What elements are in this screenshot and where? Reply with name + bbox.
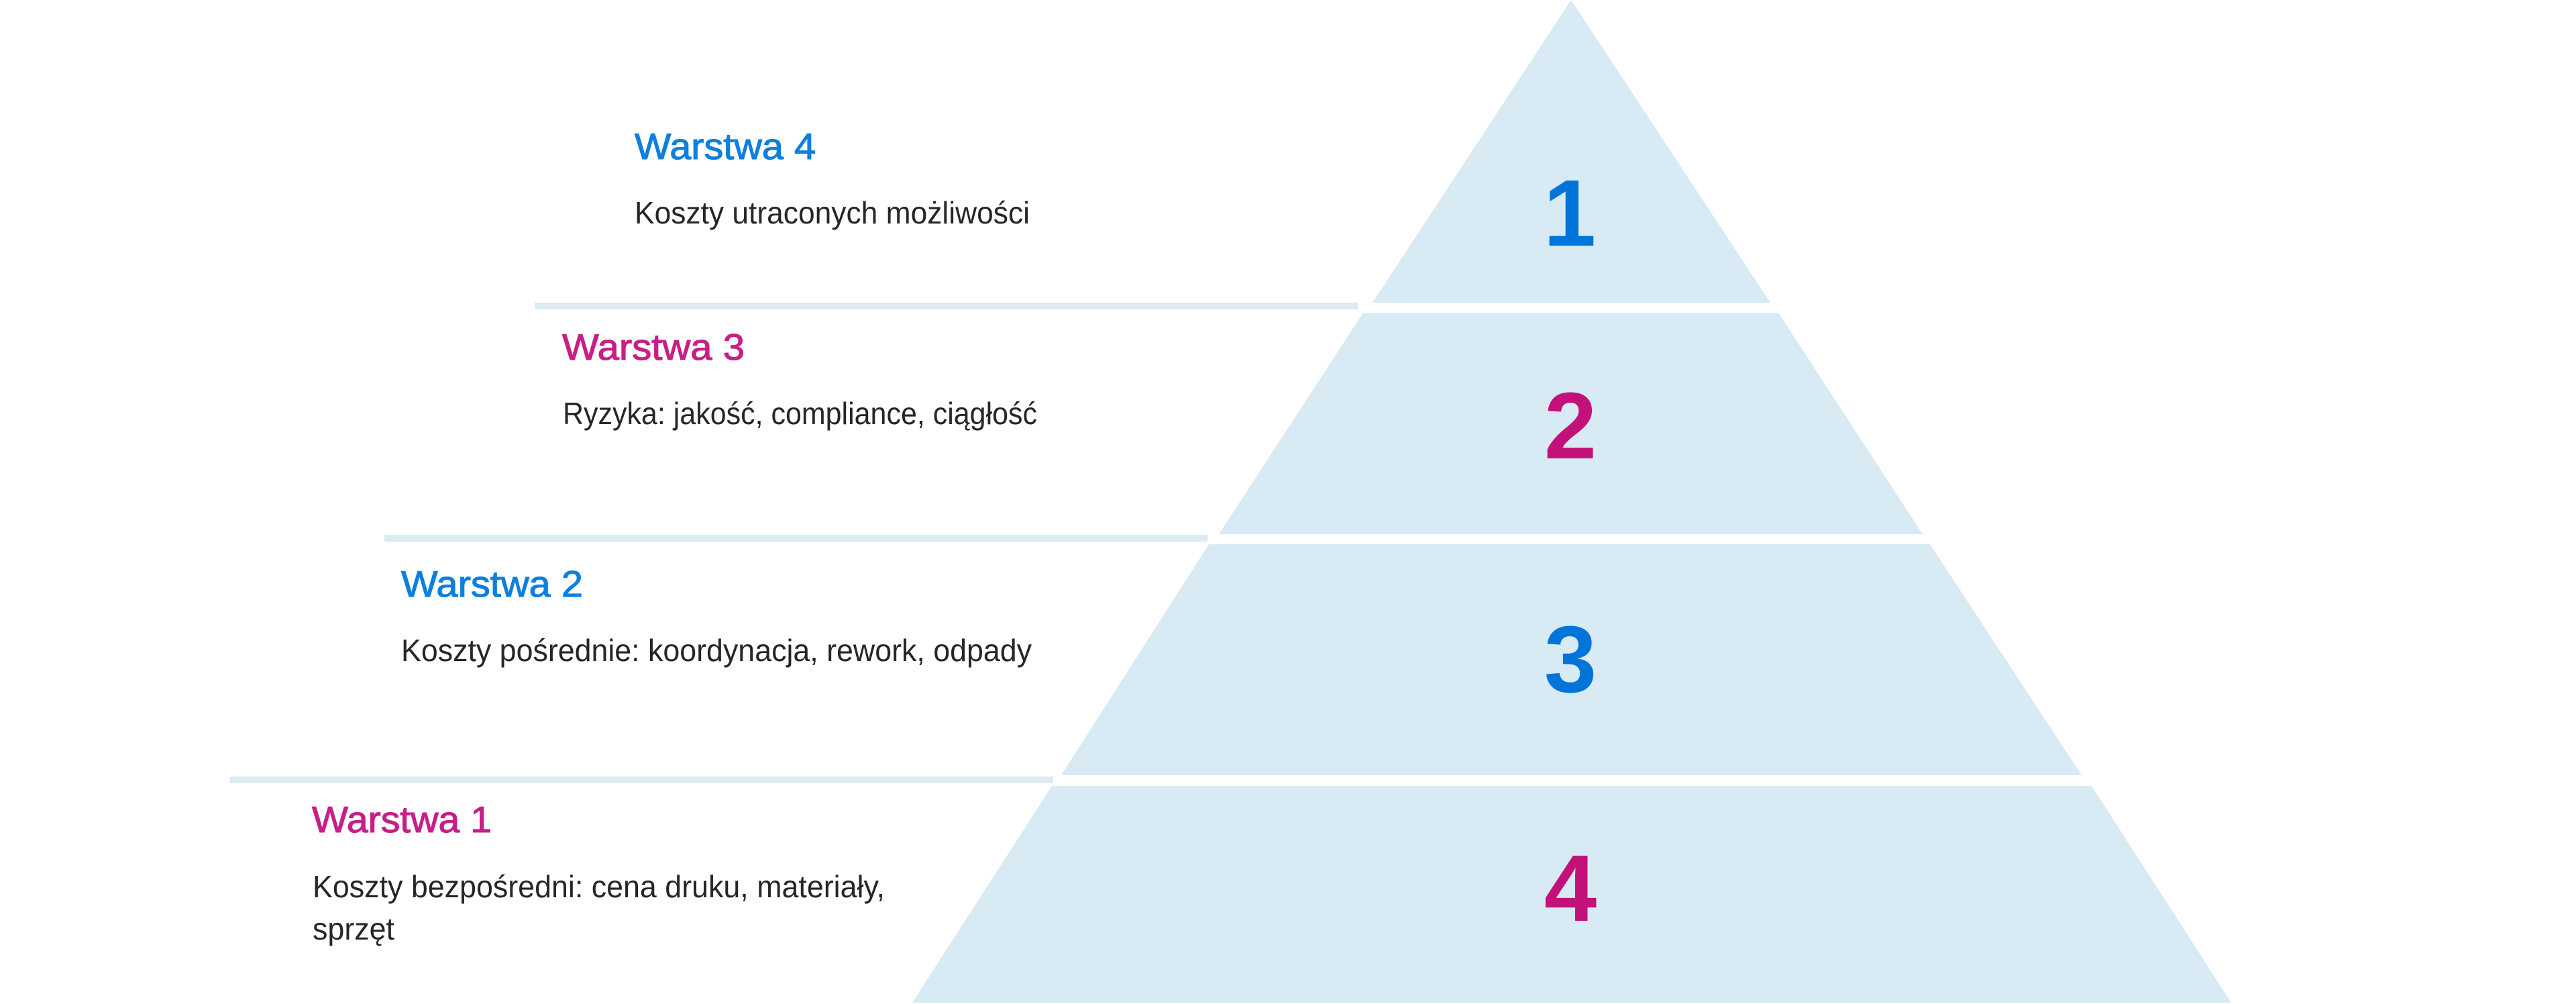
divider line above layer 3 [535,303,1358,309]
number 1: 1 [1544,160,1596,266]
layer 2 label [401,563,1032,668]
layer 4 label [635,126,1030,230]
number 4: 4 [1544,835,1597,941]
heading: Warstwa 3: Warstwa 3 [562,326,745,368]
layer 3 label [562,326,1037,431]
heading: Warstwa 4: Warstwa 4 [635,126,816,167]
layer 1 label [312,799,885,946]
pyramid tier 3 [1061,544,2082,775]
pyramid [912,0,2231,1003]
text: layer 3 description: Ryzyka: jakość, compliance, ciągłość [563,396,1037,431]
text: layer 1 description: Koszty bezpośredni: cena druku, materiały, [313,869,885,904]
pyramid tier 1 [1373,0,1770,303]
text: layer 2 description: Koszty pośrednie: koordynacja, rework, odpady [401,633,1032,668]
number 3: 3 [1544,606,1597,712]
divider line above layer 1 [230,776,1053,783]
number 2: 2 [1544,372,1597,479]
heading: Warstwa 1: Warstwa 1 [312,799,492,840]
pyramid tier 2 [1219,313,1923,534]
pyramid tier 4 [912,786,2231,1003]
divider line above layer 2 [384,535,1208,542]
text: layer 1 description continued: sprzęt [313,911,394,946]
heading: Warstwa 2: Warstwa 2 [401,563,583,605]
text: layer 4 description: Koszty utraconych możliwości [635,195,1030,230]
